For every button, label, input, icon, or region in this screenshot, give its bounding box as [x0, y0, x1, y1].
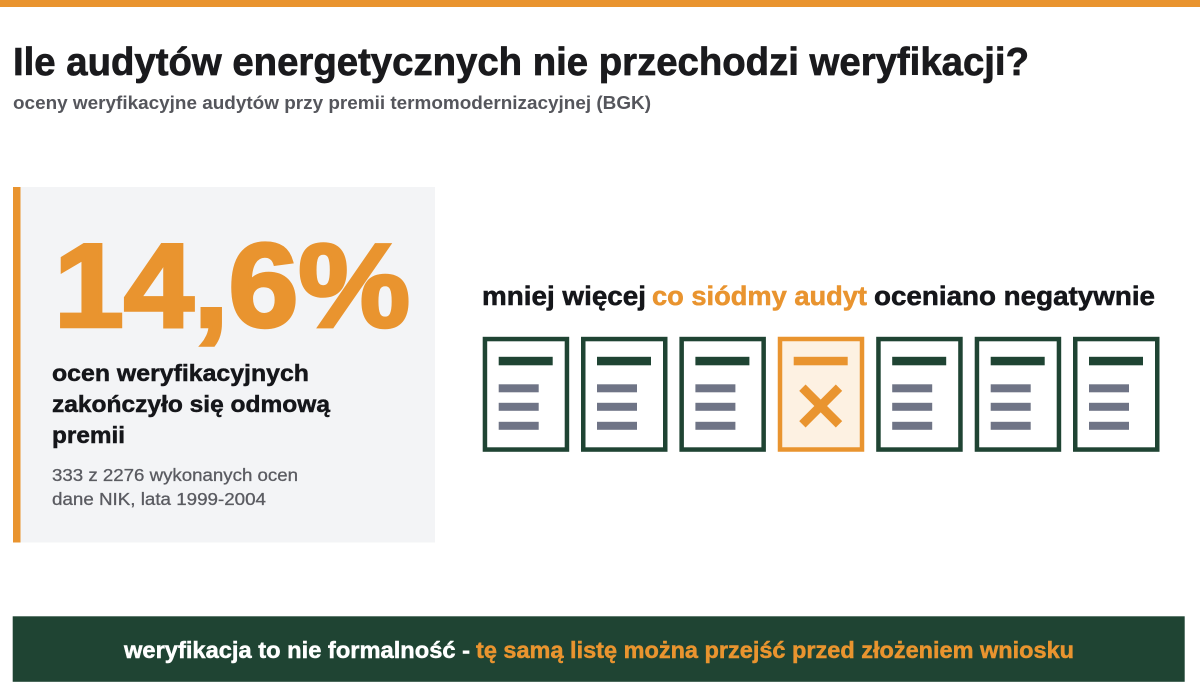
source note: 333 z 2276 wykonanych ocen [52, 465, 298, 485]
icon: document 2 [583, 339, 665, 450]
icon: document 3 [682, 339, 764, 450]
conclusion banner [13, 616, 1185, 682]
statistic description: premii [52, 422, 125, 448]
title: Ile audytów energetycznych nie przechodzi weryfikacji? [13, 41, 1029, 84]
panel: key statistic [13, 187, 435, 542]
ratio heading: oceniano negatywnie [874, 281, 1155, 311]
ratio heading: mniej więcej [482, 281, 646, 311]
statistic description: ocen weryfikacyjnych [52, 360, 309, 386]
source note [52, 465, 298, 509]
source note: dane NIK, lata 1999-2004 [52, 489, 266, 509]
icon: document 1 [485, 339, 567, 450]
banner text [123, 637, 1074, 663]
icon: rejected document [780, 339, 862, 450]
banner text: weryfikacja to nie formalność - [123, 637, 470, 663]
icon: document 5 [878, 339, 960, 450]
pictogram: seven audit documents [485, 339, 1157, 450]
top accent bar [0, 0, 1200, 7]
statistic description: zakończyło się odmową [52, 391, 330, 417]
ratio heading [482, 281, 1155, 311]
icon: document 6 [977, 339, 1059, 450]
subtitle: oceny weryfikacyjne audytów przy premii termomodernizacyjnej (BGK) [13, 92, 651, 113]
banner text: tę samą listę można przejść przed złożeniem wniosku [476, 637, 1074, 663]
ratio heading: co siódmy audyt [652, 281, 867, 311]
statistic description [52, 360, 330, 448]
icon: document 7 [1075, 339, 1157, 450]
big number: 14,6% [54, 220, 410, 352]
